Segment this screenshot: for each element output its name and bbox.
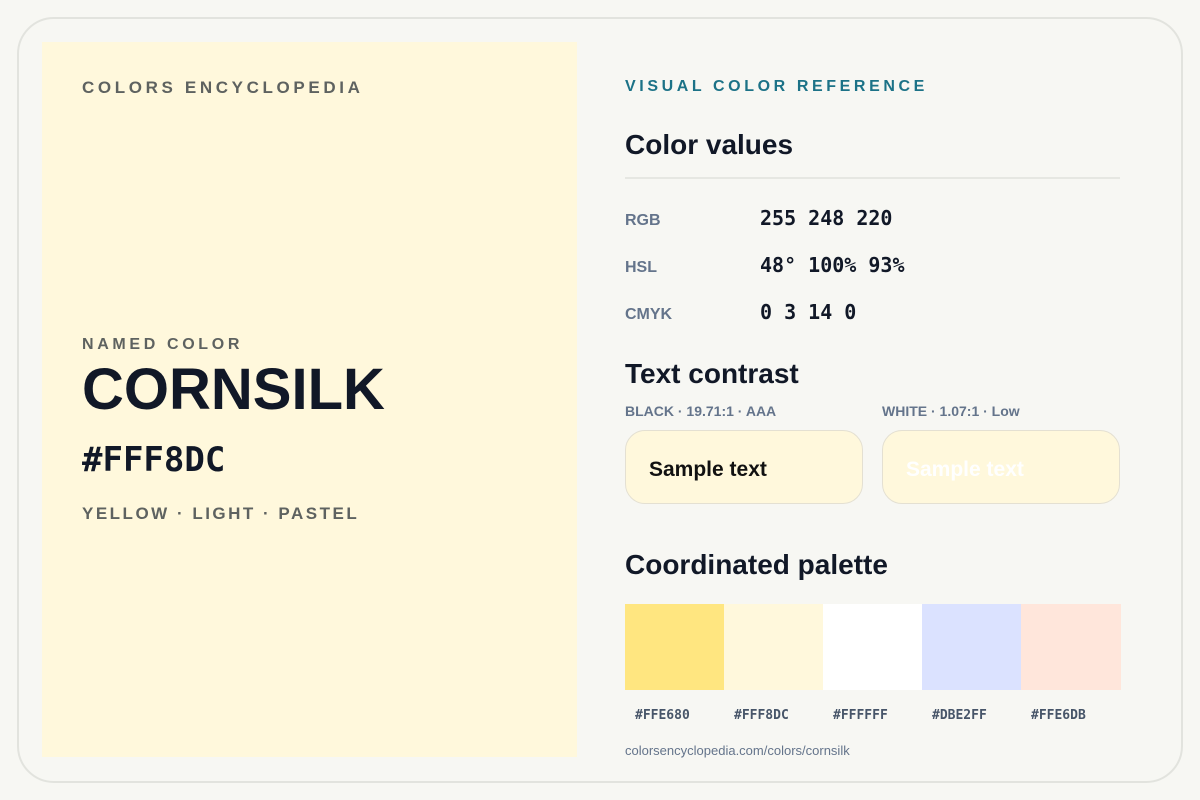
heading: color values: Color values (625, 129, 793, 160)
color tags: YELLOW · LIGHT · PASTEL (82, 504, 359, 523)
named color label: NAMED COLOR (82, 336, 243, 353)
label: RGB: RGB (625, 212, 661, 229)
swatch FFE6DB (1021, 604, 1121, 690)
heading: text contrast: Text contrast (625, 358, 799, 389)
value: HSL: 48° 100% 93% (760, 253, 904, 277)
hex label 2: #FFF8DC (734, 708, 789, 723)
value: CMYK: 0 3 14 0 (760, 300, 856, 324)
label: HSL: HSL (625, 259, 657, 276)
swatch FFF8DC (724, 604, 823, 690)
hex label 4: #DBE2FF (932, 708, 987, 723)
label: CMYK: CMYK (625, 306, 672, 323)
sample: white text (882, 430, 1120, 504)
source url: colorsencyclopedia.com/colors/cornsilk (625, 743, 850, 758)
heading: coordinated palette: Coordinated palette (625, 549, 888, 580)
hex code: #FFF8DC (82, 440, 225, 480)
color name: CORNSILK (82, 357, 385, 422)
hex label 1: #FFE680 (635, 708, 690, 723)
black sample text: Sample text (649, 458, 767, 481)
swatch FFE680 (625, 604, 724, 690)
brand label: COLORS ENCYCLOPEDIA (82, 78, 364, 97)
sample: black text (625, 430, 863, 504)
caption: white contrast: WHITE · 1.07:1 · Low (882, 403, 1020, 419)
hex label 3: #FFFFFF (833, 708, 888, 723)
section eyebrow: VISUAL COLOR REFERENCE (625, 78, 928, 95)
swatch DBE2FF (922, 604, 1021, 690)
white sample text: Sample text (906, 458, 1024, 481)
hex label 5: #FFE6DB (1031, 708, 1086, 723)
caption: black contrast: BLACK · 19.71:1 · AAA (625, 403, 776, 419)
swatch FFFFFF (823, 604, 922, 690)
value: RGB: 255 248 220 (760, 206, 892, 230)
panel: color hero (42, 42, 577, 757)
palette swatches (625, 604, 1121, 690)
